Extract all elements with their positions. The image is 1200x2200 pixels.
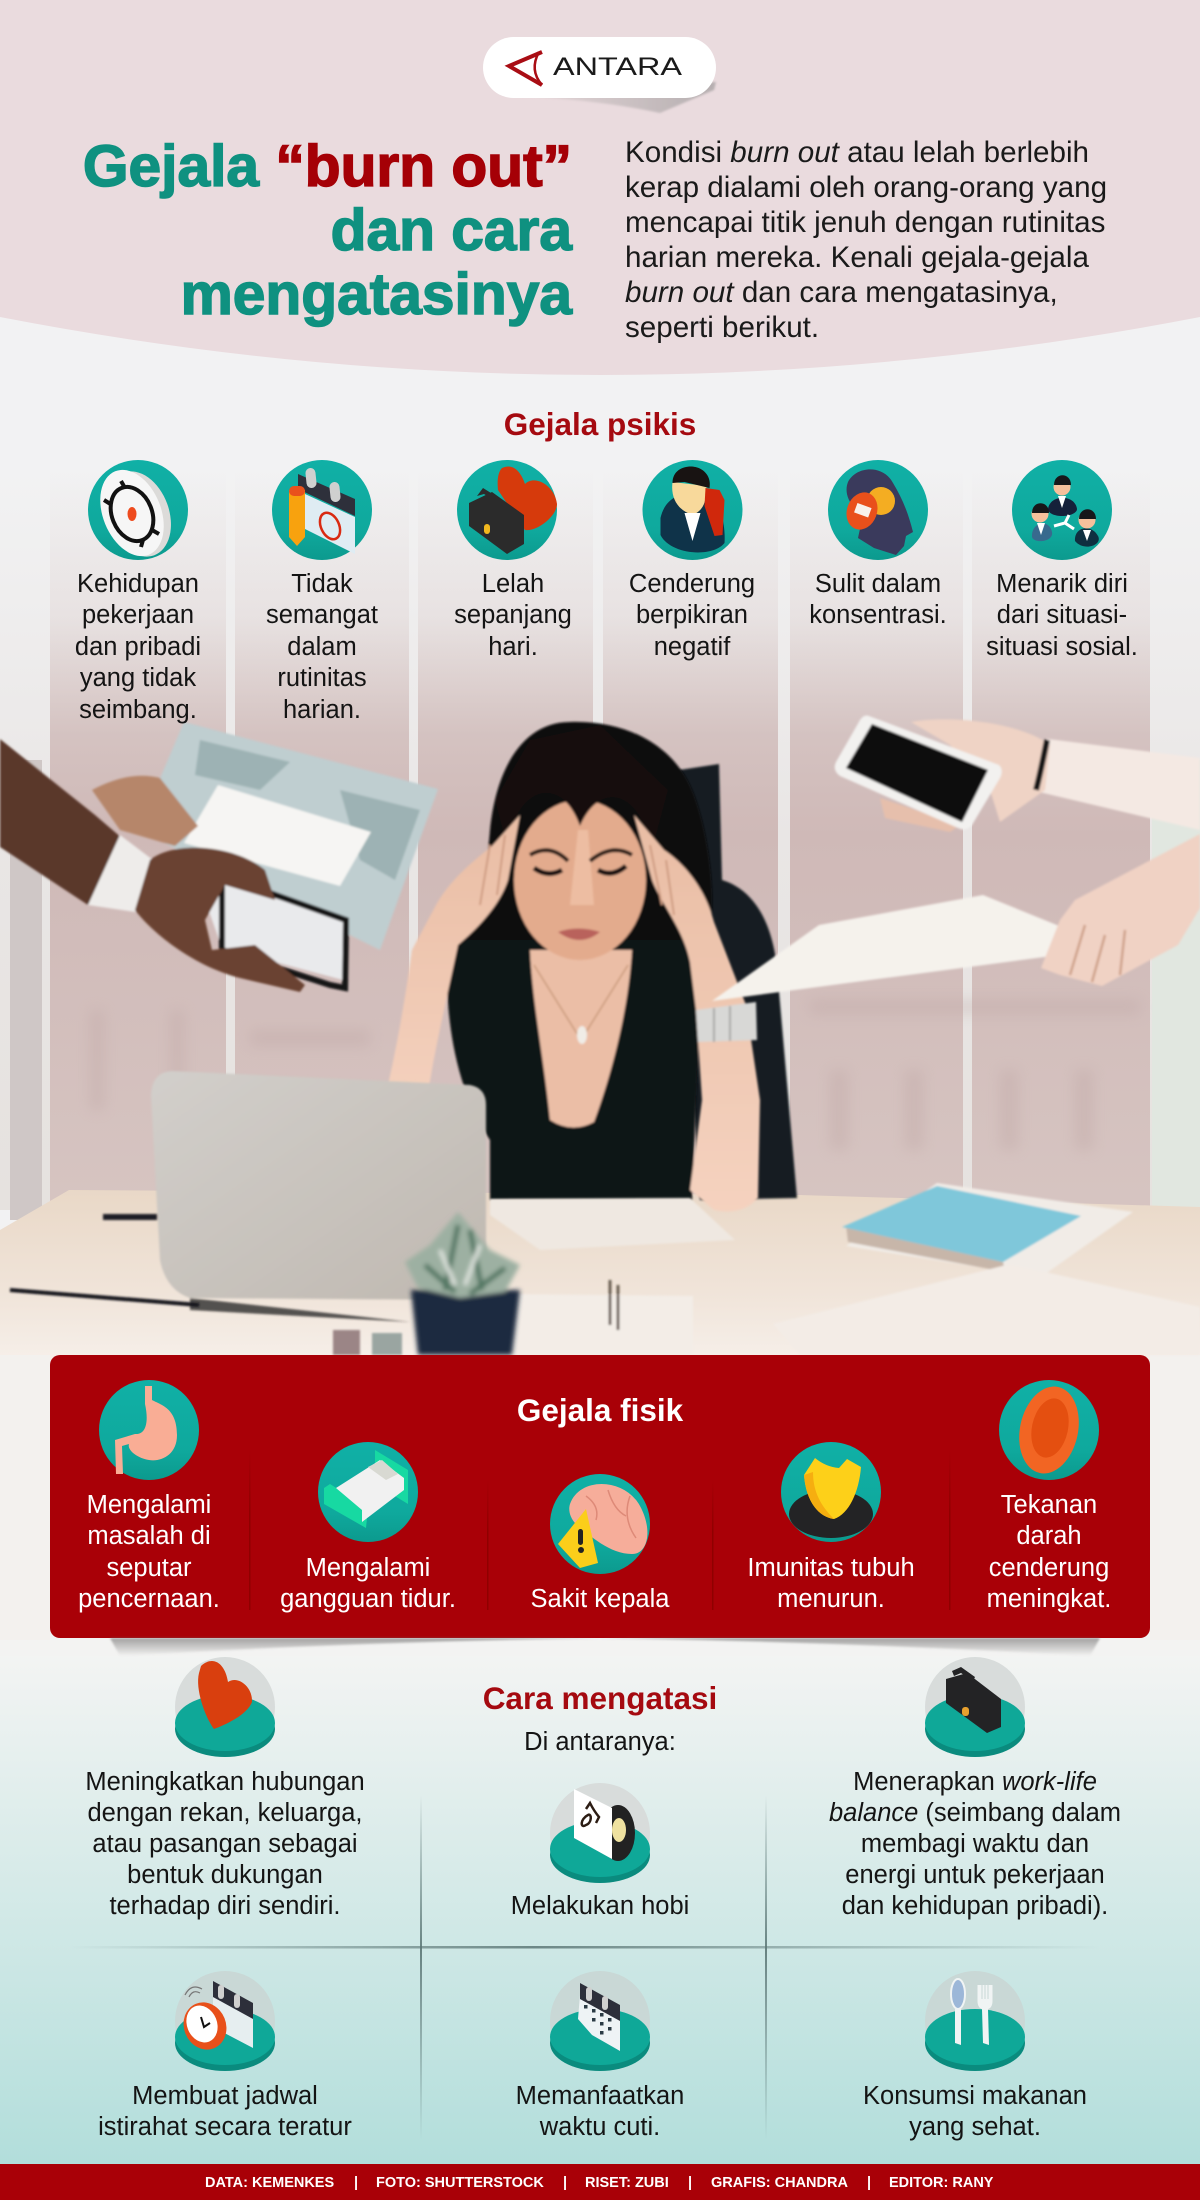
text: gejala psikis labels: berpikiran: [636, 601, 748, 629]
text: gejala psikis labels: negatif: [654, 633, 731, 661]
intro paragraph: harian mereka. Kenali gejala-gejala: [625, 241, 1089, 274]
item: waktu cuti: [516, 1971, 684, 2141]
grid lines: [70, 1795, 1100, 2140]
item: work-life balance: balance (seimbang dalam: [829, 1799, 1121, 1827]
panel: gejala psikis items: [88, 460, 1112, 566]
text: gejala psikis labels: situasi sosial.: [986, 633, 1138, 661]
text: gejala psikis labels: rutinitas: [277, 664, 367, 692]
item: gangguan tidur: gangguan tidur.: [280, 1585, 456, 1613]
footer bar: |: [354, 2175, 358, 2191]
item: pencernaan: seputar: [106, 1554, 192, 1582]
title: mengatasinya: [181, 262, 573, 327]
intro paragraph: Kondisi burn out atau lelah berlebih: [625, 136, 1089, 169]
text: gejala psikis labels: Cenderung: [629, 570, 755, 598]
logo: ANTARA: [483, 37, 716, 113]
item: lelah: [457, 460, 557, 560]
item: makanan sehat: yang sehat.: [909, 2113, 1041, 2141]
item: hubungan: bentuk dukungan: [127, 1861, 323, 1889]
photo: office wall panels: [0, 470, 1200, 1220]
item: imunitas: menurun.: [777, 1585, 885, 1613]
item: tekanan darah: [987, 1380, 1111, 1613]
item: work-life balance: membagi waktu dan: [861, 1830, 1089, 1858]
footer bar: |: [563, 2175, 567, 2191]
item: makanan sehat: [863, 1971, 1087, 2141]
text: gejala psikis labels: hari.: [488, 633, 538, 661]
text: gejala psikis labels: yang tidak: [80, 664, 196, 692]
item: hubungan: [85, 1657, 365, 1920]
item: work-life balance: dan kehidupan pribadi).: [842, 1892, 1108, 1920]
subheading: Di antaranya:: [524, 1728, 676, 1756]
item: waktu cuti: waktu cuti.: [539, 2113, 660, 2141]
item: jadwal istirahat: [98, 1971, 352, 2141]
item: makanan sehat: Konsumsi makanan: [863, 2082, 1087, 2110]
text: gejala psikis labels: pekerjaan: [82, 601, 194, 629]
text: gejala psikis labels: [75, 570, 1138, 724]
item: gangguan tidur: Mengalami: [306, 1554, 430, 1582]
item: imunitas: Imunitas tubuh: [747, 1554, 915, 1582]
footer bar: RISET: ZUBI: [585, 2175, 669, 2191]
photo: hand passing paper, right: [712, 834, 1200, 1001]
photo: desk items: [10, 1183, 1200, 1355]
item: berpikiran negatif: [642, 460, 742, 560]
intro paragraph: mencapai titik jenuh dengan rutinitas: [625, 206, 1105, 239]
text: gejala psikis labels: Kehidupan: [77, 570, 199, 598]
text: gejala psikis labels: konsentrasi.: [809, 601, 947, 629]
title: [83, 134, 573, 327]
item: hobi: Melakukan hobi: [511, 1892, 689, 1920]
footer bar: FOTO: SHUTTERSTOCK: [376, 2175, 544, 2191]
text: gejala psikis labels: harian.: [283, 696, 361, 724]
text: gejala psikis labels: dan pribadi: [75, 633, 201, 661]
text: gejala psikis labels: dalam: [287, 633, 357, 661]
header band: [0, 0, 1200, 375]
text: gejala psikis labels: dari situasi-: [997, 601, 1127, 629]
item: sakit kepala: [531, 1474, 670, 1613]
intro paragraph: [625, 136, 1107, 344]
lower background: [0, 1655, 1200, 2165]
item: menarik diri: [1012, 460, 1112, 560]
intro paragraph: kerap dialami oleh orang-orang yang: [625, 171, 1107, 204]
item: pencernaan: pencernaan.: [78, 1585, 220, 1613]
panel: gejala fisik: [50, 1355, 1150, 1638]
item: pencernaan: [78, 1380, 220, 1613]
item: kehidupan tidak seimbang: [88, 460, 188, 566]
item: jadwal istirahat: istirahat secara teratur: [98, 2113, 352, 2141]
footer bar: |: [867, 2175, 871, 2191]
item: work-life balance: energi untuk pekerjaan: [845, 1861, 1105, 1889]
text: gejala psikis labels: Sulit dalam: [815, 570, 941, 598]
title: Gejala “burn out”: [83, 134, 572, 199]
item: tekanan darah: meningkat.: [987, 1585, 1111, 1613]
item: tekanan darah: darah: [1016, 1522, 1082, 1550]
footer bar: GRAFIS: CHANDRA: [711, 2175, 848, 2191]
item: hubungan: Meningkatkan hubungan: [85, 1768, 365, 1796]
item: imunitas: [747, 1442, 915, 1613]
item: jadwal istirahat: Membuat jadwal: [132, 2082, 318, 2110]
text: gejala psikis labels: sepanjang: [454, 601, 572, 629]
photo: stressed woman: [388, 722, 760, 1212]
heading: Gejala fisik: Gejala fisik: [517, 1392, 684, 1428]
heading: Cara mengatasi: Cara mengatasi: [483, 1680, 717, 1716]
text: gejala psikis labels: Lelah: [482, 570, 544, 598]
item: work-life balance: Menerapkan work-life: [853, 1768, 1097, 1796]
title: dan cara: [331, 198, 573, 263]
text: gejala psikis labels: Menarik diri: [996, 570, 1128, 598]
item: hubungan: terhadap diri sendiri.: [109, 1892, 341, 1920]
photo: hands with printed photo and phone, left: [0, 722, 438, 992]
intro paragraph: seperti berikut.: [625, 311, 819, 344]
item: tidak semangat: [272, 460, 372, 560]
item: pencernaan: masalah di: [87, 1522, 211, 1550]
text: gejala psikis labels: seimbang.: [79, 696, 197, 724]
item: gangguan tidur: [280, 1442, 456, 1613]
text: gejala psikis labels: Tidak: [291, 570, 353, 598]
item: pencernaan: Mengalami: [87, 1491, 211, 1519]
footer bar: EDITOR: RANY: [889, 2175, 994, 2191]
logo: ANTARA: ANTARA: [553, 53, 682, 81]
footer bar: |: [688, 2175, 692, 2191]
item: tekanan darah: Tekanan: [1001, 1491, 1097, 1519]
photo: office chair: [666, 764, 797, 1200]
item: hubungan: dengan rekan, keluarga,: [87, 1799, 363, 1827]
item: hubungan: atau pasangan sebagai: [92, 1830, 358, 1858]
intro paragraph: burn out dan cara mengatasinya,: [625, 276, 1058, 309]
text: gejala psikis labels: semangat: [266, 601, 378, 629]
photo: hand with phone, top right: [835, 716, 1200, 832]
item: sakit kepala: Sakit kepala: [531, 1585, 670, 1613]
item: hobi: [511, 1783, 689, 1920]
footer bar: DATA: KEMENKES: [205, 2175, 334, 2191]
item: work-life balance: [829, 1657, 1121, 1920]
heading: Cara mengatasi: [483, 1680, 717, 1756]
item: waktu cuti: Memanfaatkan: [516, 2082, 684, 2110]
item: tekanan darah: cenderung: [989, 1554, 1109, 1582]
footer bar: [0, 2164, 1200, 2200]
heading: Gejala psikis: Gejala psikis: [504, 406, 696, 442]
photo: desk: [0, 1190, 1200, 1640]
item: konsentrasi: [828, 460, 928, 560]
photo: laptop: [151, 1071, 486, 1322]
